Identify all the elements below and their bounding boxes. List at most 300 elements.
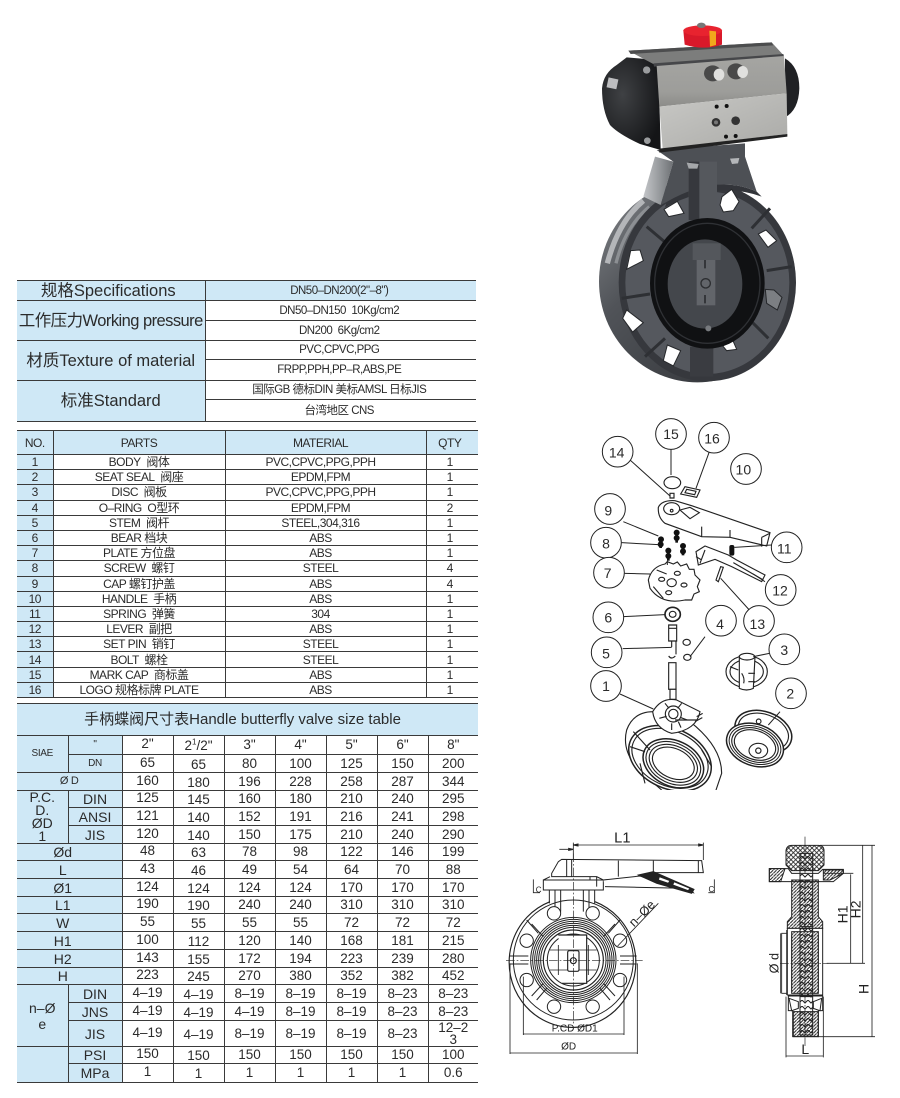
handle outline [543,859,703,893]
panel: handle butterfly valve size table: 295 [442,791,465,806]
panel: handle butterfly valve size table: Ød [53,844,72,860]
panel: parts list table: 2 [447,501,453,515]
panel: handle butterfly valve size table: 380 [289,968,312,983]
panel: handle butterfly valve size table: 4–19 [234,1004,265,1019]
panel: handle butterfly valve size table: P.C. [30,789,55,805]
panel: specifications table: DN50–DN200(2"–8") [290,285,388,297]
panel: parts list table: STEM 阀杆 [109,516,169,530]
callout numbers: 14 [609,445,625,461]
screws and caps [658,530,734,561]
panel: handle butterfly valve size table: " [93,739,97,750]
panel: handle butterfly valve size table: 88 [446,862,461,877]
bottom section [788,996,823,1037]
panel: handle butterfly valve size table: DIN [83,791,107,807]
panel: handle butterfly valve size table: 239 [391,951,414,966]
panel: handle butterfly valve size table: 43 [140,861,155,876]
panel: handle butterfly valve size table: 258 [340,774,363,789]
panel: handle butterfly valve size table: 190 [136,896,159,911]
panel: handle butterfly valve size table: 1 [246,1065,253,1080]
flange bolt holes [623,189,782,366]
panel: handle butterfly valve size table: 55 [191,916,206,931]
technical front view drawing [506,831,715,1054]
panel: parts list table: 10 [29,592,41,606]
dimension H2 [820,845,875,963]
panel: specifications table: 材质Texture of material [26,352,195,370]
panel: handle butterfly valve size table: 125 [136,790,159,805]
panel: handle butterfly valve size table: 120 [238,933,261,948]
stem and o-rings [669,625,691,699]
callout numbers: 1 [602,678,610,694]
panel: specifications table: 规格Specifications [41,282,176,300]
dimension n-Øe: n–Øe [626,898,658,929]
panel: parts list table: 1 [447,637,453,651]
panel: handle butterfly valve size table: 140 [187,828,210,843]
dimension H1: H1 [834,905,850,923]
panel: handle butterfly valve size table: L1 [55,897,71,913]
dimension n-Øe [618,898,658,946]
panel: parts list table: 1 [32,455,38,469]
panel: handle butterfly valve size table: 1 [348,1065,355,1080]
callout numbers: 9 [604,503,612,519]
panel: parts list table: EPDM,FPM [291,501,350,515]
panel: handle butterfly valve size table: 122 [340,844,363,859]
panel: handle butterfly valve size table: 382 [391,968,414,983]
panel: parts list table: MARK CAP 商标盖 [90,668,188,682]
bolt holes [520,907,627,1013]
panel: handle butterfly valve size table: 1 [399,1065,406,1080]
panel: handle butterfly valve size table: 72 [395,915,410,930]
panel: parts list table: 4 [32,501,38,515]
panel: handle butterfly valve size table: 150 [238,827,261,842]
panel: handle butterfly valve size table: 5" [345,737,358,752]
panel: handle butterfly valve size table: 452 [442,968,465,983]
panel: handle butterfly valve size table: ANSI [79,808,111,824]
panel: handle butterfly valve size table: 100 [136,932,159,947]
panel: handle butterfly valve size table: 240 [391,827,414,842]
panel: handle butterfly valve size table: 125 [340,756,363,771]
panel: parts list table: 1 [447,592,453,606]
panel: handle butterfly valve size table: 146 [391,844,414,859]
callout numbers: 7 [604,565,612,581]
panel: handle butterfly valve size table: 124 [238,880,261,895]
panel: specifications table: 工作压力Working pressure [19,312,203,330]
panel: handle butterfly valve size table: 181 [391,933,414,948]
panel: handle butterfly valve size table: JIS [85,1026,105,1042]
panel: parts list table: 7 [32,546,38,560]
panel: parts list table: STEEL [303,653,338,667]
panel: parts list table: 15 [29,668,41,682]
panel: handle butterfly valve size table: 190 [187,898,210,913]
panel: handle butterfly valve size table: 152 [238,809,261,824]
panel: parts list table: 1 [447,546,453,560]
panel: parts list table: QTY [438,436,461,450]
panel: parts list table: ABS [309,683,332,697]
panel: handle butterfly valve size table: 4–19 [132,1003,163,1018]
panel: handle butterfly valve size table: 8–23 [387,1004,418,1019]
disc [726,653,767,690]
panel: parts list table: 9 [32,577,38,591]
panel: handle butterfly valve size table: 124 [136,879,159,894]
section markers: C [708,885,714,894]
panel: parts list table: STEEL,304,316 [281,516,360,530]
exploded parts diagram [590,418,807,790]
panel: parts list table: 1 [447,668,453,682]
panel: specifications table: 国际GB 德标DIN 美标AMSL 日标JIS [252,384,426,396]
panel: parts list table: 3 [32,485,38,499]
dimension P.CD ØD1: P.CD ØD1 [552,1024,598,1035]
panel: handle butterfly valve size table: 3 [450,1032,457,1046]
panel: handle butterfly valve size table: DN [88,758,102,768]
panel: parts list table: 5 [32,516,38,530]
panel: handle butterfly valve size table: n–Ø [29,1000,55,1016]
panel: handle butterfly valve size table: 310 [442,897,465,912]
panel: parts list table: PVC,CPVC,PPG,PPH [265,485,376,499]
panel: handle butterfly valve size table: 48 [140,843,155,858]
panel: parts list table: ABS [309,668,332,682]
panel: handle butterfly valve size table: 245 [187,969,210,984]
flange outer band [599,181,796,382]
panel: handle butterfly valve size table: 112 [188,934,209,949]
panel: handle butterfly valve size table: 168 [340,933,363,948]
panel: handle butterfly valve size table: 150 [340,1047,363,1062]
panel: handle butterfly valve size table: D. [35,802,49,818]
panel: handle butterfly valve size table: 240 [289,897,312,912]
panel: handle butterfly valve size table: 65 [191,757,206,772]
panel: handle butterfly valve size table: 150 [391,1047,414,1062]
panel: handle butterfly valve size table: 298 [442,809,465,824]
dimension ØD [510,963,637,1054]
panel: handle butterfly valve size table: 手柄蝶阀尺寸表Handle butterfly valve size table [84,711,401,728]
panel: handle butterfly valve size table: 280 [442,951,465,966]
panel: parts list table: PVC,CPVC,PPG,PPH [265,455,376,469]
panel: handle butterfly valve size table: 8–19 [234,986,265,1001]
panel: handle butterfly valve size table: 180 [187,775,210,790]
dimension L: L [801,1041,809,1057]
panel: parts list table: SCREW 螺钉 [104,561,174,575]
panel: handle butterfly valve size table: 8–19 [336,1026,367,1041]
panel: handle butterfly valve size table: 72 [344,915,359,930]
red position indicator [683,23,722,48]
panel: handle butterfly valve size table: 140 [187,810,210,825]
panel: handle butterfly valve size table: 290 [442,827,465,842]
callout numbers: 3 [780,642,788,658]
panel: handle butterfly valve size table: JNS [82,1004,108,1020]
panel: handle butterfly valve size table: 175 [289,827,312,842]
panel: handle butterfly valve size table: 3" [243,737,256,752]
panel: handle butterfly valve size table: ØD [32,815,53,831]
stem section [781,853,823,1020]
panel: handle butterfly valve size table: 63 [191,845,206,860]
panel: handle butterfly valve size table: 8–19 [285,986,316,1001]
panel: handle butterfly valve size table: 145 [187,792,210,807]
flange spokes [622,208,792,357]
panel: handle butterfly valve size table: 4" [294,737,307,752]
neck and stem channel [643,143,762,377]
panel: handle butterfly valve size table: 216 [340,809,363,824]
callout numbers: 8 [602,536,610,552]
panel: handle butterfly valve size table: 46 [191,863,206,878]
actuator end cap left [602,57,661,150]
panel: handle butterfly valve size table: 210 [340,791,363,806]
centre lines [506,853,643,1023]
neck [549,890,595,912]
panel: handle butterfly valve size table: 344 [442,774,465,789]
panel: handle butterfly valve size table: 4–19 [132,1025,163,1040]
panel: handle butterfly valve size table: Ø D [60,775,79,787]
panel: specifications table: DN50–DN150 10Kg/cm2 [279,305,399,317]
panel: handle butterfly valve size table: 223 [136,967,159,982]
panel: handle butterfly valve size table: 4–19 [183,1027,214,1042]
mark cap, bolt and logo plate [664,477,700,498]
panel: handle butterfly valve size table: 310 [391,897,414,912]
panel: specifications table: DN200 6Kg/cm2 [299,325,380,337]
panel: parts list table: BOLT 螺栓 [110,653,168,667]
panel: handle butterfly valve size table: H [58,968,68,984]
callout numbers: 10 [736,461,751,477]
panel: handle butterfly valve size table: 4–19 [132,985,163,1000]
panel: handle butterfly valve size table: 170 [340,880,363,895]
panel: specifications table [17,280,476,422]
panel: handle butterfly valve size table: 8–19 [336,1004,367,1019]
dimension Ød: Ø d [768,953,782,973]
panel: handle butterfly valve size table: 124 [187,881,210,896]
panel: handle butterfly valve size table: 196 [238,774,261,789]
cap and handle section [769,845,843,882]
panel: handle butterfly valve size table: 100 [442,1047,465,1062]
panel: handle butterfly valve size table: 1 [144,1064,151,1079]
panel: parts list table: 1 [447,653,453,667]
panel: handle butterfly valve size table: 160 [136,773,159,788]
panel: handle butterfly valve size table: JIS [85,826,105,842]
rubber seat and disc [650,218,765,349]
panel: handle butterfly valve size table: 100 [289,756,312,771]
panel: parts list table: PLATE 方位盘 [103,546,175,560]
panel: handle butterfly valve size table: 8–19 [336,986,367,1001]
panel: parts list table: 1 [447,531,453,545]
panel: parts list table: SEAT SEAL 阀座 [95,470,183,484]
panel: handle butterfly valve size table: 310 [340,897,363,912]
panel: specifications table: 台湾地区 CNS [304,405,374,417]
panel: handle butterfly valve size table: 120 [136,826,159,841]
panel: handle butterfly valve size table: 200 [442,756,465,771]
panel: handle butterfly valve size table: 143 [136,950,159,965]
handle [658,501,770,547]
panel: handle butterfly valve size table: 352 [340,968,363,983]
flange rings [509,900,637,1027]
panel: handle butterfly valve size table: 155 [187,952,210,967]
panel: parts list table: 1 [447,683,453,697]
panel: parts list table: SET PIN 销钉 [103,637,175,651]
panel: parts list table: HANDLE 手柄 [102,592,176,606]
panel: parts list table: MATERIAL [293,436,348,450]
panel: handle butterfly valve size table: 0.6 [444,1065,463,1080]
panel: parts list table: 1 [447,470,453,484]
panel: handle butterfly valve size table: PSI [84,1047,106,1063]
panel: handle butterfly valve size table: 223 [340,951,363,966]
panel: parts list table: LEVER 副把 [106,622,172,636]
panel: handle butterfly valve size table: 8–19 [234,1026,265,1041]
centre lines [780,837,828,1047]
panel: parts list table: 14 [29,653,41,667]
product photo: pneumatic butterfly valve [599,22,800,382]
panel: handle butterfly valve size table: 78 [242,844,257,859]
panel: handle butterfly valve size table: 210 [340,827,363,842]
seat seal [720,703,798,774]
panel: handle butterfly valve size table: 8–19 [285,1026,316,1041]
panel: handle butterfly valve size table: 8–23 [387,1026,418,1041]
bear ring [665,607,680,621]
section markers [533,879,714,895]
panel: parts list table: 1 [447,485,453,499]
panel: handle butterfly valve size table: 170 [442,880,465,895]
panel: parts list table: BEAR 档块 [111,531,167,545]
panel: parts list table: DISC 阀板 [111,485,167,499]
panel: parts list table: O–RING O型环 [99,501,179,515]
panel: parts list table: 1 [447,622,453,636]
panel: parts list table: EPDM,FPM [291,470,350,484]
panel: handle butterfly valve size table: 172 [238,951,261,966]
panel: parts list table: PARTS [121,436,157,450]
callout numbers: 11 [777,540,792,556]
panel: parts list table: ABS [309,546,332,560]
panel: handle butterfly valve size table: L [59,862,67,878]
panel: parts list table: 1 [447,516,453,530]
panel: handle butterfly valve size table: 4–19 [183,1005,214,1020]
panel: handle butterfly valve size table: 150 [391,756,414,771]
panel: handle butterfly valve size table: 98 [293,844,308,859]
panel: parts list table: 2 [32,470,38,484]
panel: handle butterfly valve size table: 8–23 [438,986,468,1001]
panel: handle butterfly valve size table: 55 [242,915,257,930]
dimension H: H [856,984,872,994]
panel: handle butterfly valve size table: 1 [195,1066,202,1081]
panel: handle butterfly valve size table: 72 [446,915,461,930]
panel: handle butterfly valve size table: 228 [289,774,312,789]
panel: handle butterfly valve size table: 21/2" [184,738,213,753]
panel: parts list table: 8 [32,561,38,575]
panel: handle butterfly valve size table: 180 [289,791,312,806]
panel: parts list table: ABS [309,622,332,636]
panel: parts list table: SPRING 弹簧 [103,607,175,621]
panel: handle butterfly valve size table: 8–23 [387,986,418,1001]
dimension H2: H2 [848,900,864,918]
panel: handle butterfly valve size table: 49 [242,862,257,877]
dimension H1 [823,873,865,963]
panel: handle butterfly valve size table: 54 [293,862,308,877]
panel: handle butterfly valve size table: SIAE [31,748,53,759]
panel: parts list table: 1 [447,455,453,469]
panel: handle butterfly valve size table: DIN [83,986,107,1002]
panel: handle butterfly valve size table [17,703,478,1083]
valve body [618,699,722,804]
callout numbers: 4 [716,616,724,632]
callout numbers: 2 [786,686,794,702]
panel: handle butterfly valve size table: 121 [136,808,159,823]
panel: handle butterfly valve size table: 191 [289,809,312,824]
panel: handle butterfly valve size table: 215 [442,933,465,948]
panel: handle butterfly valve size table: 4–19 [183,987,214,1002]
section markers: C [536,886,542,895]
panel: parts list table: 11 [29,607,40,621]
panel: handle butterfly valve size table: Ø1 [53,880,72,896]
panel: handle butterfly valve size table: 8–23 [438,1004,468,1019]
panel: handle butterfly valve size table: 6" [396,737,409,752]
panel: parts list table: 12 [29,622,41,636]
panel: parts list table: ABS [309,577,332,591]
panel: parts list table: BODY 阀体 [109,455,169,469]
panel: parts list table: ABS [309,531,332,545]
dimension H [818,845,875,1037]
dimension Ød [768,933,782,993]
panel: handle butterfly valve size table: 270 [238,968,261,983]
disc detail [550,935,597,983]
callout numbers: 16 [704,430,720,446]
panel: handle butterfly valve size table: 287 [391,774,414,789]
panel: parts list table: CAP 螺钉护盖 [103,577,175,591]
panel: specifications table: 标准Standard [61,392,161,410]
panel: handle butterfly valve size table: 150 [238,1047,261,1062]
technical section view drawing [768,836,875,1058]
panel: handle butterfly valve size table: 1 [297,1065,304,1080]
panel: handle butterfly valve size table: 65 [140,755,155,770]
panel: parts list table: STEEL [303,637,338,651]
panel: handle butterfly valve size table: 124 [289,880,312,895]
callout numbers: 13 [750,616,765,632]
panel: handle butterfly valve size table: 70 [395,862,410,877]
actuator fittings [704,63,748,81]
panel: parts list table: LOGO 规格标牌 PLATE [80,683,198,697]
panel: specifications table: FRPP,PPH,PP–R,ABS,PE [277,364,401,376]
panel: handle butterfly valve size table: 240 [238,897,261,912]
lever and set pin [696,546,765,582]
panel: parts list table: STEEL [303,561,338,575]
panel: handle butterfly valve size table: 240 [391,791,414,806]
panel: handle butterfly valve size table: 55 [140,914,155,929]
panel: parts list table: ABS [309,592,332,606]
panel: parts list table: 4 [447,577,453,591]
panel: parts list table: 1 [447,607,453,621]
panel: handle butterfly valve size table: 150 [289,1047,312,1062]
panel: parts list table: 4 [447,561,453,575]
plate [648,562,700,601]
panel: parts list table: 13 [29,637,41,651]
panel: parts list table: NO. [25,436,45,450]
callout numbers: 5 [602,645,610,661]
panel: handle butterfly valve size table: 1 [38,828,46,844]
panel: parts list table: 304 [311,607,330,621]
panel: handle butterfly valve size table: H2 [54,950,72,966]
panel: handle butterfly valve size table: 12–2 [438,1020,468,1034]
callout numbers [591,419,806,709]
dimension L1 [559,831,703,860]
panel: handle butterfly valve size table: 2" [141,736,154,751]
panel: handle butterfly valve size table: 140 [289,933,312,948]
panel: handle butterfly valve size table: 64 [344,862,359,877]
panel: handle butterfly valve size table: 241 [391,809,414,824]
panel: handle butterfly valve size table: H1 [54,932,72,948]
panel: handle butterfly valve size table: MPa [81,1065,109,1081]
panel: handle butterfly valve size table: 170 [391,880,414,895]
dimension L1: L1 [614,831,630,847]
panel: handle butterfly valve size table: 8" [447,737,459,752]
callout numbers: 12 [772,582,788,598]
leader lines [620,442,780,725]
panel: handle butterfly valve size table: 55 [293,915,308,930]
panel: handle butterfly valve size table: 194 [289,951,312,966]
panel: handle butterfly valve size table: 199 [442,844,465,859]
dimension L [786,997,823,1057]
panel: handle butterfly valve size table: 150 [187,1048,210,1063]
